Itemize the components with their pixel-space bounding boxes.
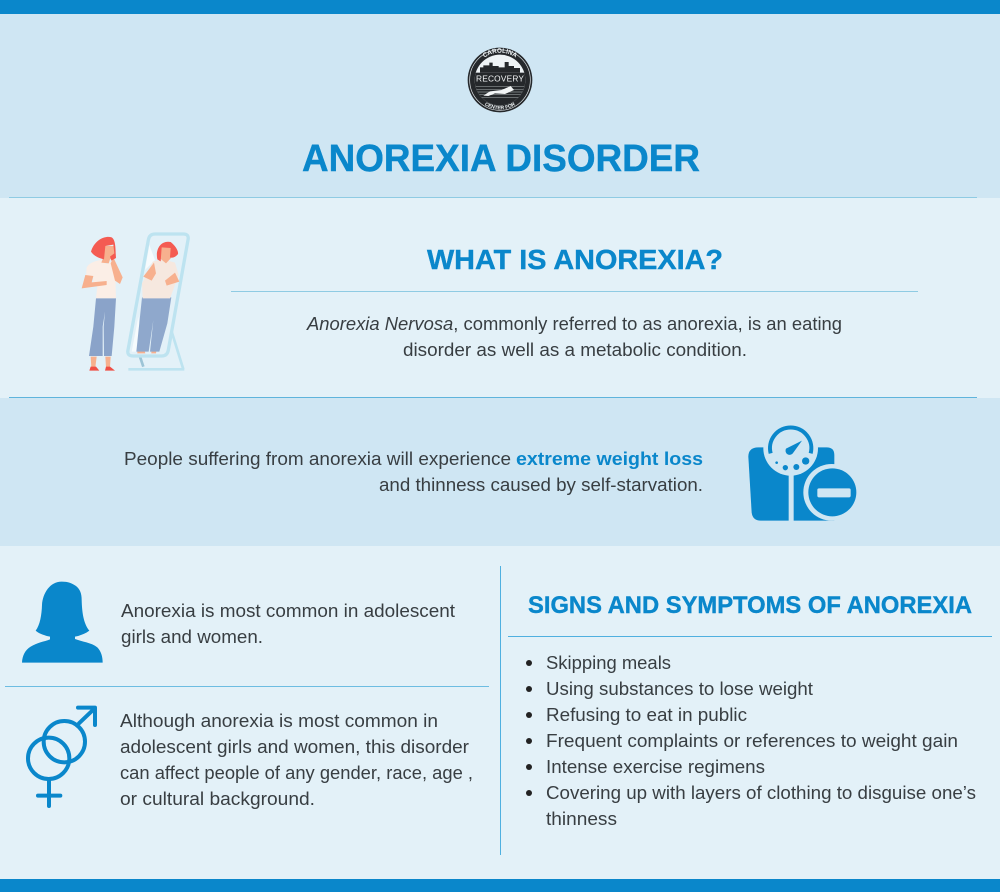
- bottom bar: [0, 879, 1000, 892]
- panel: header: [0, 14, 1000, 198]
- text: any gender: or cultural background.: [120, 788, 315, 809]
- symptoms list: Frequent complaints or references to weight gain: [546, 730, 958, 751]
- header divider: [9, 196, 977, 198]
- text: most common group: Anorexia is most common in adolescent: [121, 600, 455, 621]
- symptoms list: Refusing to eat in public: [546, 704, 747, 725]
- definition text: disorder as well as a metabolic condition.: [403, 339, 747, 360]
- text: any gender: can affect people of any gender, race, age ,: [120, 762, 473, 783]
- icon: Carolina Recovery Center logo: RECOVERY: [476, 74, 524, 84]
- definition text: Anorexia Nervosa, commonly referred to as anorexia, is an eating: [306, 313, 842, 334]
- heading: what is anorexia: WHAT IS ANOREXIA?: [427, 244, 723, 275]
- panel: signs and symptoms: [508, 592, 992, 829]
- weight loss text: [124, 448, 703, 495]
- band divider: [9, 396, 977, 398]
- icon: gender symbols: [28, 708, 95, 806]
- heading: signs and symptoms: SIGNS AND SYMPTOMS OF ANOREXIA: [528, 592, 972, 619]
- icon: woman silhouette: [22, 582, 103, 663]
- icon: Carolina Recovery Center logo: CENTER FOR: [485, 102, 516, 110]
- symptoms list: thinness: [546, 808, 617, 829]
- text: any gender: Although anorexia is most common in: [120, 710, 438, 731]
- symptoms list: Skipping meals: [546, 652, 671, 673]
- text: most common group: girls and women.: [121, 626, 263, 647]
- text: any gender: adolescent girls and women, this disorder: [120, 736, 469, 757]
- symptoms list: [526, 652, 976, 829]
- panel: who is affected: [22, 582, 473, 809]
- weight loss text: extreme weight loss: [516, 448, 703, 469]
- top bar: [0, 0, 1000, 14]
- icon: woman looking in mirror: [82, 234, 188, 371]
- symptoms list: Intense exercise regimens: [546, 756, 765, 777]
- text: any gender: [120, 710, 473, 809]
- panel: what is anorexia: [0, 198, 1000, 398]
- icon: Carolina Recovery Center logo: [468, 48, 532, 112]
- panel: weight loss: [0, 398, 1000, 546]
- title: ANOREXIA DISORDER: [302, 138, 700, 180]
- weight loss text: and thinness caused by self-starvation.: [379, 474, 703, 495]
- icon: Carolina Recovery Center logo: CAROLINA: [483, 48, 516, 58]
- weight loss text: People suffering from anorexia will experience: [124, 448, 511, 469]
- symptoms list: Covering up with layers of clothing to disguise one’s: [546, 782, 976, 803]
- text: most common group: [121, 600, 455, 647]
- definition text: [306, 313, 842, 360]
- symptoms list: Using substances to lose weight: [546, 678, 813, 699]
- icon: weighing scale with minus: [748, 421, 860, 522]
